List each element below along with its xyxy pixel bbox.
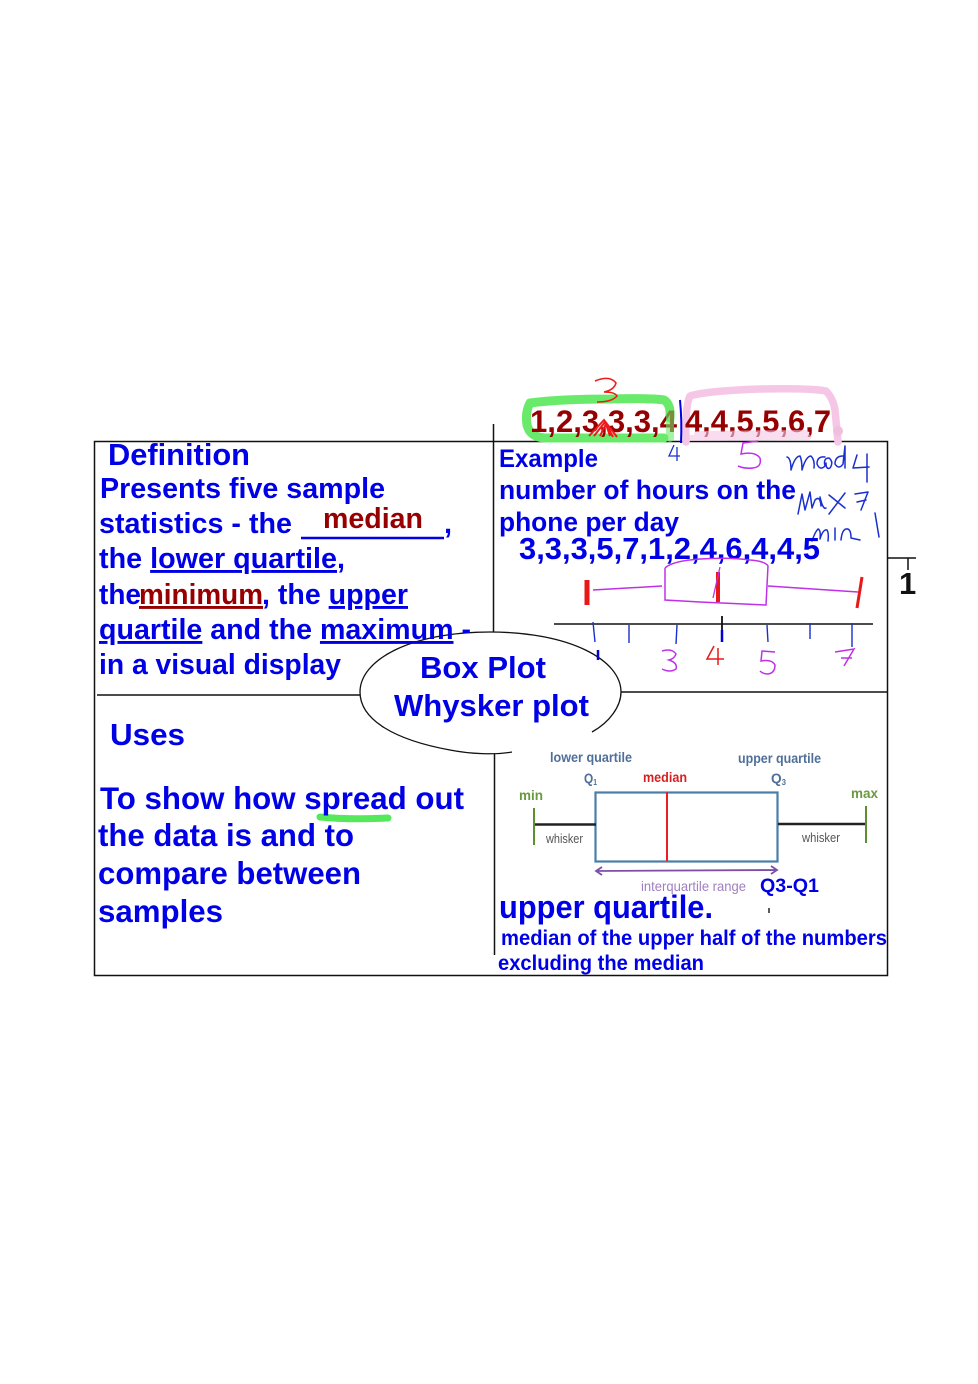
heading: upper quartile: upper quartile. <box>499 889 713 925</box>
definition text block: quartile and the maximum - <box>99 614 471 646</box>
definition text block: statistics - the <box>99 508 292 540</box>
page number: 1 <box>899 566 916 601</box>
highlight overlaps on data values <box>670 408 808 438</box>
definition text block <box>99 473 471 681</box>
definition text block: , the upper <box>262 579 408 611</box>
median divider line <box>680 400 681 443</box>
diagram labels: max <box>851 785 878 801</box>
formula: q3-q1: Q3-Q1 <box>760 876 819 897</box>
green highlight under spread <box>320 817 388 819</box>
diagram labels: whisker <box>545 831 584 846</box>
handwritten 5 <box>738 441 760 468</box>
min and max ticks <box>534 806 866 845</box>
uses text block: the data is and to <box>98 817 354 853</box>
handwritten mode, max, min <box>787 446 879 541</box>
definition text block: in a visual display <box>99 649 341 681</box>
diagram labels: whisker <box>801 830 841 845</box>
definition text block: Presents five sample <box>100 473 385 505</box>
subtitle: whysker plot: Whysker plot <box>394 688 589 723</box>
uses text block: compare between <box>98 855 361 891</box>
diagram labels: Q <box>584 770 595 786</box>
hand-drawn box plot <box>587 558 862 608</box>
panel: example: phone per day <box>499 507 679 537</box>
panel: annotated box plot diagram: excluding the median <box>498 952 704 975</box>
heading: example: Example <box>499 445 598 473</box>
whiskers <box>534 823 866 826</box>
answer: minimum: minimum <box>139 579 263 611</box>
handwritten 4 <box>669 445 680 461</box>
definition text block: , <box>444 508 452 540</box>
heading: definition: Definition <box>108 437 250 472</box>
panel: definition <box>99 437 471 681</box>
handwritten axis labels <box>662 646 854 674</box>
upper quartile definition: median of the upper half of the numbers <box>501 927 887 950</box>
panel: uses <box>98 717 464 929</box>
median line <box>666 792 668 861</box>
number line <box>554 616 873 660</box>
diagram labels <box>519 749 878 894</box>
definition text block: the lower quartile, <box>99 543 345 575</box>
example description: number of hours on the <box>499 475 796 505</box>
green highlight lower half <box>526 399 670 438</box>
box <box>596 792 778 862</box>
diagram labels: Q <box>771 770 782 786</box>
diagram labels: 3 <box>782 778 787 787</box>
definition text block: the <box>99 579 141 611</box>
diagram labels: upper quartile <box>738 750 821 766</box>
handwritten 3 and lower quartile mark <box>589 378 617 437</box>
frayer model frame <box>94 424 916 976</box>
title: box plot: Box Plot <box>420 650 546 685</box>
panel: example: 4,4,5,5,6,7 <box>685 403 831 439</box>
ordered data values: 1,2,3,3,3,4 <box>530 403 677 439</box>
diagram labels: min <box>519 787 543 803</box>
interquartile arrow <box>596 866 777 875</box>
diagram labels: median <box>643 769 687 785</box>
heading: uses: Uses <box>110 717 185 752</box>
pink highlight upper half <box>686 389 838 442</box>
panel: annotated box plot diagram <box>498 749 887 975</box>
panel: example <box>499 378 879 674</box>
uses text block: samples <box>98 893 223 929</box>
uses text block: To show how spread out <box>100 780 464 816</box>
answer: median: median <box>323 503 423 535</box>
diagram labels: 1 <box>593 778 597 787</box>
diagram labels: interquartile range <box>641 878 746 894</box>
diagram labels: lower quartile <box>550 749 632 765</box>
raw data values: 3,3,3,5,7,1,2,4,6,4,4,5 <box>519 531 820 566</box>
centre oval: box plot title <box>360 632 621 754</box>
uses text block <box>98 780 464 929</box>
